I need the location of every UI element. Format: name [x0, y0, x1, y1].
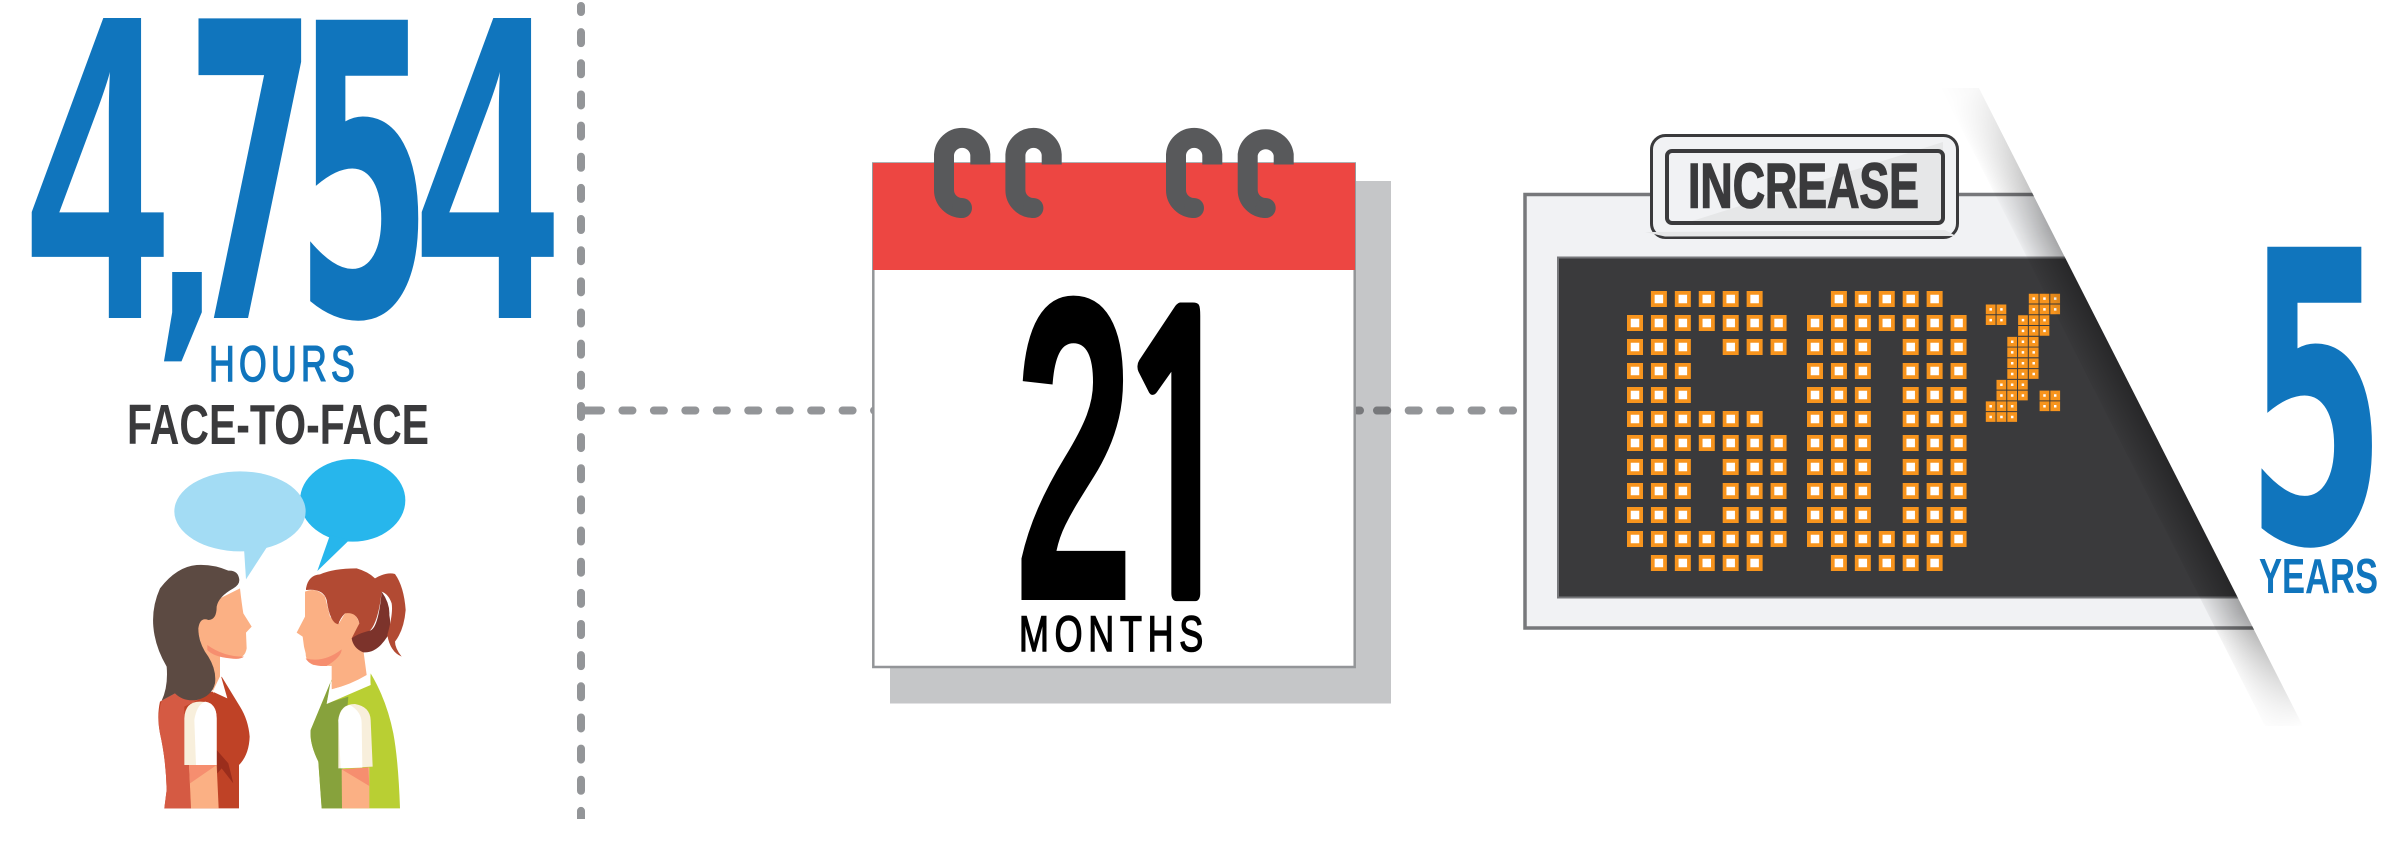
woman: left [153, 565, 252, 808]
big number 4,754: , [155, 72, 219, 387]
speech bubble: left, light blue [174, 471, 306, 579]
label: increase: INCREASE [1688, 152, 1919, 222]
illustration: two women talking [153, 459, 406, 808]
big number 4,754 [28, 0, 557, 415]
page-fold shadow [1972, 90, 2296, 716]
display screen [1558, 258, 2318, 598]
calendar page [873, 164, 1355, 667]
speech bubble: right, blue [300, 459, 405, 571]
LED display panel: 60% increase [1525, 136, 2325, 628]
calendar binder rings [944, 138, 1284, 218]
LED digits 60 [1627, 299, 2060, 563]
stat: 4,754 hours face-to-face [28, 0, 557, 457]
horizontal dashed connector [581, 406, 1514, 414]
calendar drop shadow [890, 181, 1391, 704]
stat: 5 years [2246, 166, 2386, 638]
big number 21: 2 [1014, 206, 1134, 693]
display housing [1525, 194, 2325, 628]
calendar red header [873, 163, 1355, 270]
vertical dashed divider [577, 6, 585, 819]
calendar: 21 months [873, 138, 1355, 693]
label: hours: HOURS [209, 336, 359, 392]
label: months: MONTHS [1019, 606, 1209, 662]
woman: right [297, 568, 406, 808]
big number 21: 1 [1109, 274, 1252, 655]
increase sign [1645, 136, 1958, 238]
label: face-to-face: FACE-TO-FACE [127, 393, 429, 457]
page-fold white cut-away [1979, 88, 2407, 726]
